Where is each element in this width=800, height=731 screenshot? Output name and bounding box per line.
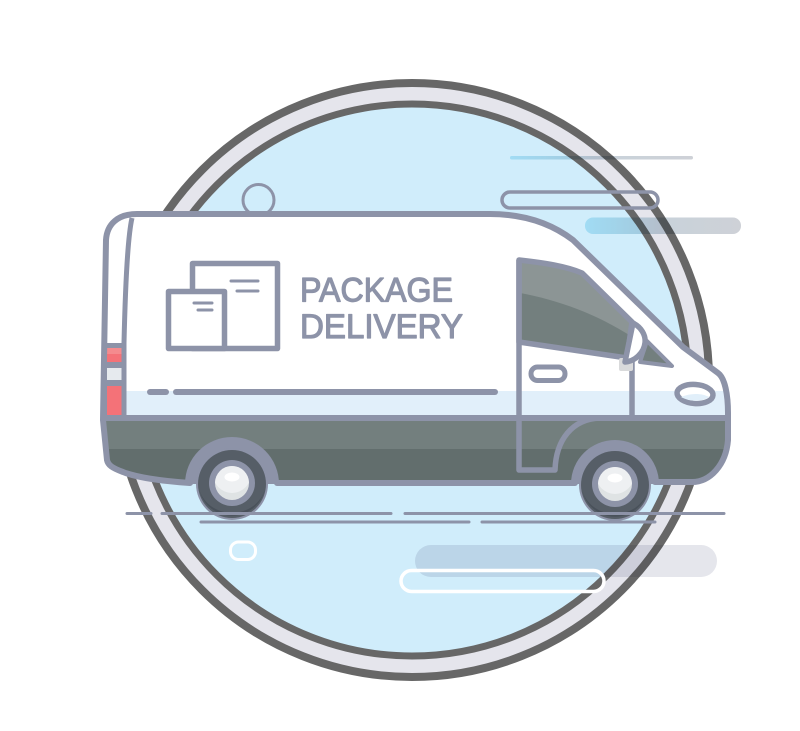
motion streaks upper right: [502, 156, 741, 234]
door outline: [519, 260, 632, 470]
wheel arches: [185, 437, 659, 484]
roof antenna: [243, 184, 274, 216]
icon: packages: [168, 264, 278, 348]
headlight: [676, 383, 714, 405]
road lines: [127, 514, 724, 522]
van body fill: [106, 217, 725, 480]
motion streaks lower: [230, 542, 717, 592]
door handle: [531, 367, 565, 380]
mirror shadow: [619, 358, 633, 371]
rear door line: [124, 218, 132, 417]
front wheel: [579, 449, 651, 521]
tail lights: [107, 348, 122, 415]
front quarter window: [640, 341, 672, 366]
van lettering: DELIVERY: [300, 308, 463, 346]
van lettering: PACKAGE: [300, 272, 453, 310]
rear wheel: [196, 448, 268, 520]
van lettering: [300, 272, 463, 346]
van window: [515, 260, 640, 365]
background circle with ring: [115, 83, 709, 677]
side mirror: [625, 323, 645, 362]
illustration: package delivery van: [100, 79, 741, 681]
side stripe: [150, 389, 495, 395]
van: [100, 205, 740, 521]
van body outline: [103, 214, 728, 483]
